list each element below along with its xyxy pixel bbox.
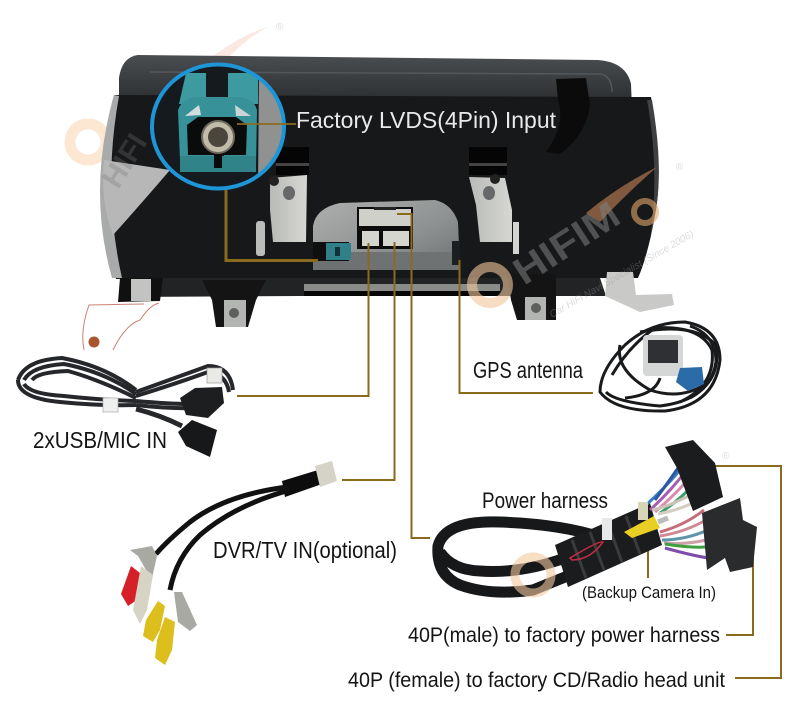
leader	[237, 123, 296, 125]
white rca plug	[133, 566, 153, 624]
blue connector	[676, 367, 704, 391]
watermark: registered mark top: ®	[276, 22, 284, 33]
right recess	[469, 147, 507, 175]
teal body	[178, 97, 257, 162]
label: 2xUSB/MIC IN	[33, 427, 167, 453]
right bracket screw	[490, 174, 500, 184]
white plug	[315, 461, 337, 487]
watermark ring	[70, 124, 106, 160]
left edge silver strip	[100, 95, 122, 278]
small left post	[256, 221, 265, 256]
teal lower lip	[180, 156, 256, 172]
antenna puck	[643, 335, 683, 376]
white connector	[207, 368, 222, 383]
centre pin core	[208, 127, 228, 147]
GPS antenna	[473, 322, 720, 411]
braided loop	[438, 522, 600, 592]
mid left nut plate	[224, 300, 246, 327]
right strap	[546, 78, 590, 154]
label: 40P male: 40P(male) to factory power harness	[408, 624, 720, 647]
power harness	[438, 440, 757, 593]
line: DVR	[342, 242, 394, 480]
lens border	[152, 64, 284, 188]
centre pin ring	[202, 121, 234, 153]
RCA tail	[658, 518, 668, 522]
white connector block	[357, 207, 413, 249]
line: backup camera	[647, 535, 649, 578]
sheath	[282, 470, 322, 497]
mid right bolt	[531, 303, 541, 313]
white tag one	[602, 518, 612, 540]
DVR / TV cable	[121, 461, 397, 665]
lower tray	[120, 278, 606, 297]
centre bay lower plate	[313, 252, 460, 270]
head unit rear view	[83, 55, 674, 350]
USB plug one	[180, 387, 224, 418]
lower grey caps	[174, 592, 197, 631]
grey caps	[130, 546, 157, 578]
left tab silver	[131, 279, 151, 301]
watermark: registered mark right: ®	[676, 162, 684, 173]
red plug	[121, 566, 140, 606]
watermark swoosh	[205, 27, 268, 66]
line: USB	[237, 243, 368, 396]
tray silver rail	[304, 284, 500, 291]
tray dark rail	[304, 291, 500, 296]
left foot outline	[83, 303, 159, 350]
braided trunk	[555, 503, 662, 587]
metal strip	[258, 80, 282, 174]
left reflection swoosh	[103, 160, 170, 235]
upper cable	[156, 487, 287, 554]
teal upper tab	[179, 73, 258, 104]
watermark ring on harness	[515, 557, 551, 593]
white tag	[103, 398, 118, 412]
label: DVR/TV IN(optional)	[213, 537, 397, 563]
left bracket screw	[269, 176, 279, 186]
right tab	[605, 272, 674, 312]
copper dot	[88, 336, 100, 348]
right window	[235, 105, 251, 116]
line: LVDS to socket	[226, 190, 318, 260]
watermark tagline: Car HiFi Navi Specialist (Since 2006)	[548, 229, 696, 321]
watermark ring	[472, 267, 508, 303]
watermark brand: HIFIM	[506, 194, 628, 294]
white tag two	[638, 502, 648, 520]
line: 40P female	[715, 466, 781, 678]
watermark: top left logo on white	[70, 27, 268, 160]
label: backup camera: (Backup Camera In)	[582, 583, 716, 602]
label: Factory LVDS(4Pin) Input	[296, 107, 557, 133]
watermark ring small	[634, 201, 656, 223]
lower cable	[170, 490, 290, 590]
inset: LVDS connector lens	[152, 64, 284, 190]
dark gps socket	[452, 241, 460, 265]
red wire	[570, 542, 603, 560]
mid right nut plate	[525, 297, 546, 320]
cable loops	[18, 358, 233, 426]
yellow RCA	[624, 516, 660, 538]
watermark: logo over head unit	[96, 128, 696, 321]
left window	[185, 105, 201, 116]
lens fill	[152, 64, 284, 188]
block frame	[357, 207, 413, 249]
left recess	[276, 147, 309, 175]
label: Power harness	[482, 488, 608, 513]
dark block left	[313, 242, 349, 261]
yellow plug two	[155, 617, 175, 665]
left bracket	[270, 175, 307, 242]
watermark: registered mark harness: ®	[722, 451, 730, 462]
left bottom connector	[362, 231, 379, 246]
label: GPS antenna	[473, 357, 583, 383]
main body	[101, 95, 659, 279]
label: 40P female: 40P (female) to factory CD/Radio head unit	[348, 669, 725, 692]
watermark top left brand: HIFI	[96, 128, 154, 194]
mid left bolt	[229, 308, 239, 318]
mid left foot	[202, 280, 266, 327]
left recess strip	[276, 163, 309, 166]
right recess strip	[469, 163, 507, 166]
teal socket slot	[335, 247, 340, 256]
right bottom connector	[383, 231, 409, 246]
top bezel	[119, 55, 632, 110]
centre bay	[313, 200, 460, 270]
left tab	[118, 278, 163, 302]
trunk ribs	[572, 516, 640, 578]
inner bezel line	[150, 72, 612, 92]
connector lines	[226, 190, 781, 678]
line: GPS	[460, 260, 593, 393]
line: power	[397, 214, 430, 538]
right bracket slot	[483, 186, 495, 200]
coiled cable	[600, 322, 720, 411]
lip notch	[214, 155, 222, 168]
yellow plug one	[143, 601, 165, 642]
top connector notch	[374, 207, 396, 210]
right edge sheen	[647, 100, 659, 240]
left bracket slot	[283, 186, 295, 200]
small right post	[513, 222, 519, 254]
USB plug two	[178, 420, 217, 457]
lower wires	[660, 510, 708, 558]
right bracket	[469, 177, 512, 242]
top connector	[359, 209, 411, 226]
watermark swoosh	[586, 167, 657, 222]
mid right foot	[507, 274, 556, 320]
line: 40P male	[726, 557, 753, 635]
lower connector	[702, 498, 757, 572]
USB / MIC cable	[18, 358, 233, 457]
antenna label plate	[648, 340, 678, 363]
upper wires	[645, 462, 704, 514]
dark cavity	[187, 117, 247, 156]
upper connector	[665, 440, 723, 511]
teal socket	[326, 243, 351, 260]
